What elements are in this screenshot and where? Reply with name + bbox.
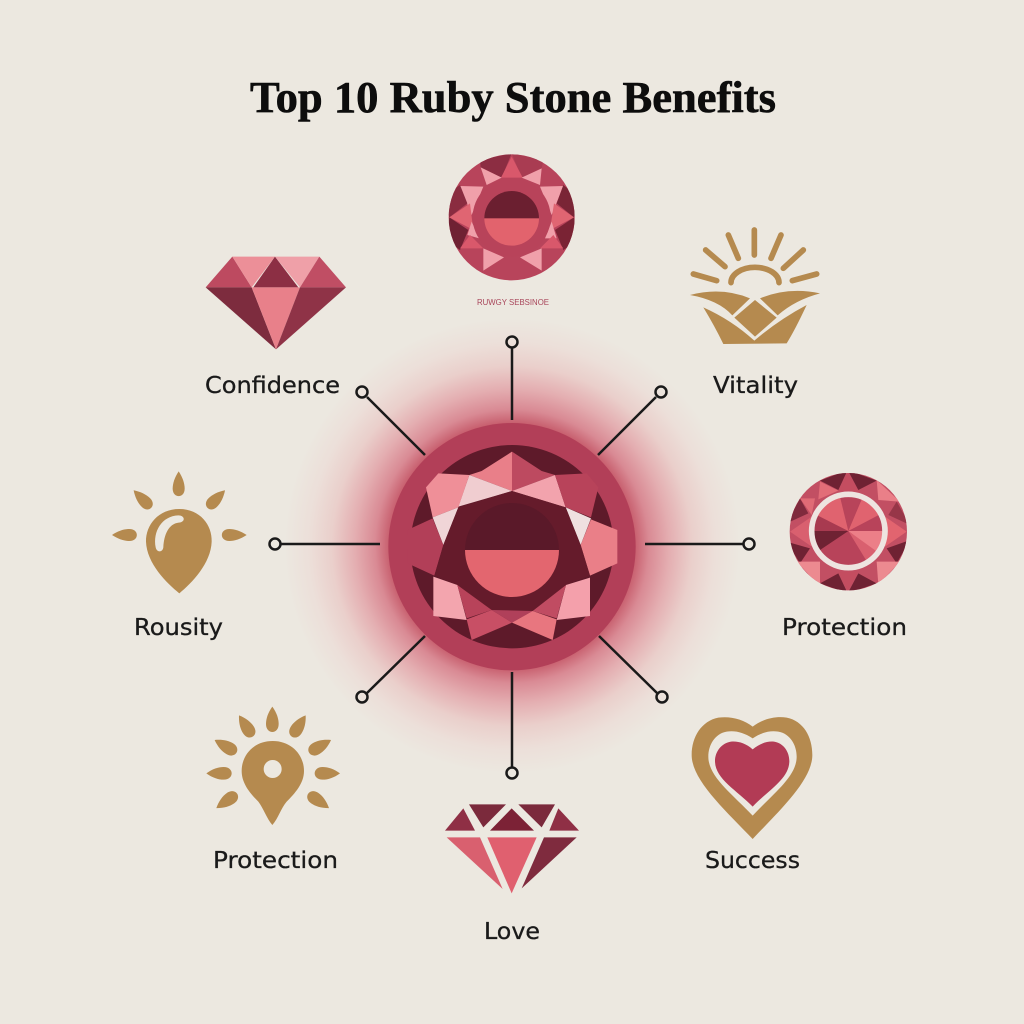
label: love: Love: [484, 919, 540, 945]
icon: top ruby gem: [443, 153, 580, 280]
label: success: Success: [705, 848, 800, 874]
label: rousity: Rousity: [134, 615, 223, 641]
title: Top 10 Ruby Stone Benefits: [250, 73, 776, 122]
label: confidence: Confidence: [205, 373, 340, 399]
icon: success heart: [692, 717, 812, 839]
central ruby gem: [388, 423, 636, 670]
icon: love diamond: [445, 804, 579, 893]
small gem caption: RUWGY SEBSINOE: [477, 298, 549, 307]
icon: protection bulb: [206, 707, 340, 825]
icon: confidence diamond: [206, 257, 346, 349]
label: protection left: Protection: [213, 848, 338, 874]
infographic canvas: [112, 80, 907, 940]
connector lines: [270, 336, 754, 778]
icon: protection round ruby: [787, 470, 910, 593]
central glow: [284, 318, 740, 774]
icon: rousity drop: [112, 471, 247, 593]
label: protection right: Protection: [782, 615, 907, 641]
icon: vitality sunrise: [690, 230, 820, 344]
label: vitality: Vitality: [713, 373, 798, 399]
